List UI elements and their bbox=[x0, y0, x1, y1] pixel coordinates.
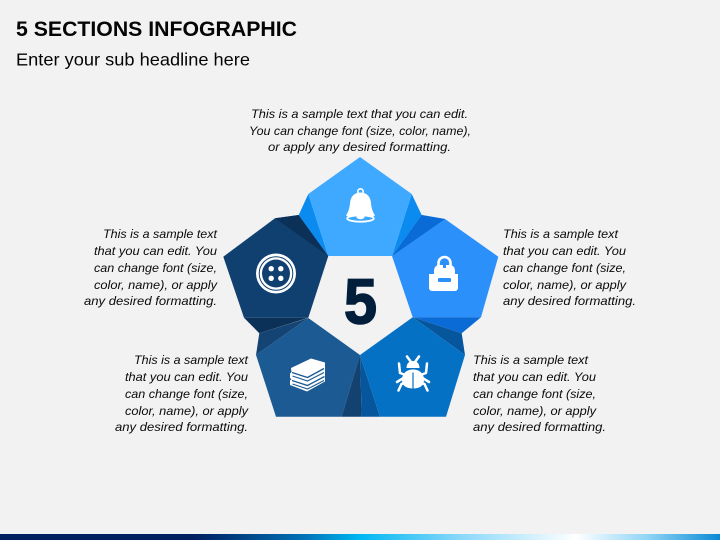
text block: lower left bbox=[115, 354, 249, 434]
icon: books bbox=[290, 358, 325, 392]
subtitle: Enter your sub headline here bbox=[16, 50, 250, 70]
icon: backpack bbox=[429, 257, 458, 291]
text block: upper left: can change font (size, bbox=[94, 262, 217, 275]
panel: books pentagon bbox=[256, 318, 362, 417]
text block: upper left: color, name), or apply bbox=[94, 279, 218, 292]
text block: lower right: can change font (size, bbox=[473, 388, 596, 401]
text block: lower right: that you can edit. You bbox=[473, 371, 597, 384]
text block: lower left: any desired formatting. bbox=[115, 421, 248, 434]
text block: lower right: color, name), or apply bbox=[473, 405, 597, 418]
text block: top: You can change font (size, color, name), bbox=[249, 125, 471, 138]
icon: button bbox=[256, 254, 296, 294]
text block: upper right: that you can edit. You bbox=[503, 245, 627, 258]
title: 5 SECTIONS INFOGRAPHIC bbox=[16, 17, 297, 41]
text block: upper right: can change font (size, bbox=[503, 262, 626, 275]
text block: upper right: color, name), or apply bbox=[503, 279, 627, 292]
text block: upper right: any desired formatting. bbox=[503, 295, 636, 308]
text block: lower left: can change font (size, bbox=[125, 388, 248, 401]
text block: upper right bbox=[503, 228, 636, 308]
text block: upper right: This is a sample text bbox=[503, 228, 619, 241]
panel: dark navy pentagon bbox=[223, 215, 328, 333]
text block: top bbox=[249, 108, 471, 154]
text block: lower left: color, name), or apply bbox=[125, 405, 249, 418]
icon: bell bbox=[346, 189, 375, 222]
panel: mid blue pentagon bbox=[392, 215, 498, 333]
panel: bug pentagon bbox=[360, 317, 465, 417]
text block: upper left: any desired formatting. bbox=[84, 295, 217, 308]
icon: bug bbox=[397, 356, 429, 390]
text block: top: This is a sample text that you can edit. bbox=[251, 108, 468, 121]
text block: upper left: This is a sample text bbox=[103, 228, 218, 241]
text block: upper left: that you can edit. You bbox=[94, 245, 218, 258]
bottom gradient bar bbox=[0, 534, 720, 540]
panel: top light blue pentagon bbox=[299, 157, 422, 256]
text block: upper left bbox=[84, 228, 218, 308]
text block: lower right: any desired formatting. bbox=[473, 421, 606, 434]
text block: lower right: This is a sample text bbox=[473, 354, 589, 367]
text block: lower right bbox=[473, 354, 606, 434]
center number 5: 5 bbox=[344, 266, 377, 338]
text block: top: or apply any desired formatting. bbox=[268, 141, 451, 154]
text block: lower left: This is a sample text bbox=[134, 354, 249, 367]
text block: lower left: that you can edit. You bbox=[125, 371, 249, 384]
